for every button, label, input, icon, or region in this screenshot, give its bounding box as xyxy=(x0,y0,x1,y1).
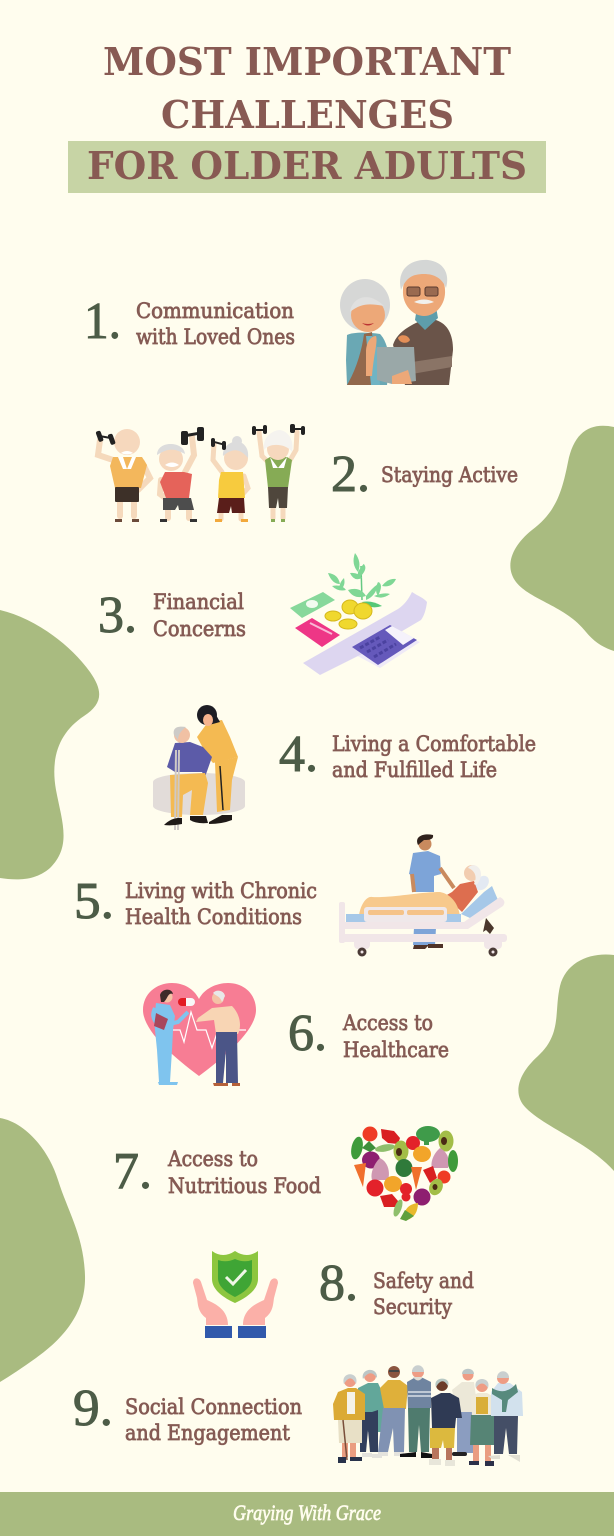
nurse xyxy=(197,720,238,763)
item 4: living a comfortable and fulfilled life xyxy=(153,705,536,830)
icon: older couple with tablet xyxy=(340,260,453,385)
pill xyxy=(178,998,195,1006)
person 8 xyxy=(488,1371,523,1462)
person 7 xyxy=(469,1379,496,1466)
item 6: access to healthcare: Healthcare xyxy=(343,1038,449,1063)
right hand xyxy=(243,1278,278,1325)
item 3: financial concerns: 3. xyxy=(98,587,137,644)
mattress and frame xyxy=(346,914,461,923)
footer bar xyxy=(0,1492,614,1536)
banknote xyxy=(290,592,335,618)
item 7: access to nutritious food: Access to xyxy=(167,1147,258,1172)
icon: carer beside patient in hospital bed xyxy=(339,834,507,956)
item 7: access to nutritious food: Nutritious Food xyxy=(168,1174,321,1199)
item 4: living a comfortable and fulfilled life: and Fulfilled Life xyxy=(332,758,497,783)
figure 4 xyxy=(252,424,305,522)
item 2: staying active: Staying Active xyxy=(381,463,518,488)
footer bar: Graying With Grace xyxy=(233,1500,381,1525)
item 2: staying active: 2. xyxy=(331,446,370,503)
item 3: financial concerns: Financial xyxy=(153,590,244,615)
left hand xyxy=(193,1278,228,1325)
icon: caregiver helping seated older man xyxy=(153,705,245,830)
carer xyxy=(409,851,441,892)
figure 1 xyxy=(95,429,150,522)
plant xyxy=(328,553,396,607)
title: MOST IMPORTANT xyxy=(103,39,511,84)
item 6: access to healthcare: 6. xyxy=(288,1005,327,1062)
item 1: communication with loved ones: 1. xyxy=(84,293,121,350)
title highlight band xyxy=(68,141,546,193)
coins xyxy=(325,600,372,629)
item 9: social connection and engagement: Social Connection xyxy=(125,1395,302,1420)
icon: four seniors lifting dumbbells xyxy=(95,424,305,522)
calculator xyxy=(352,625,417,665)
patient xyxy=(167,742,212,777)
ottoman xyxy=(153,773,245,815)
item 6: access to healthcare: Access to xyxy=(342,1011,433,1036)
icon: money, card, receipt and calculator xyxy=(290,553,427,675)
item 3: financial concerns xyxy=(98,553,427,675)
person 6 xyxy=(452,1369,478,1456)
item 1: communication with loved ones xyxy=(84,260,453,385)
item 8: safety and security: Security xyxy=(373,1295,453,1320)
item 4: living a comfortable and fulfilled life: Living a Comfortable xyxy=(332,732,536,757)
person 3 xyxy=(378,1366,408,1456)
item 7: access to nutritious food xyxy=(113,1126,458,1221)
receipt xyxy=(303,592,427,675)
item 4: living a comfortable and fulfilled life: 4. xyxy=(279,726,318,783)
title: CHALLENGES xyxy=(161,92,454,137)
item 9: social connection and engagement xyxy=(73,1365,523,1466)
item 9: social connection and engagement: 9. xyxy=(73,1380,113,1437)
person 5 xyxy=(429,1379,462,1466)
icon: heart with nurse and older man xyxy=(143,983,256,1086)
icon: hands holding shield xyxy=(193,1251,278,1338)
item 5: living with chronic health conditions: 5. xyxy=(74,873,114,930)
wheels xyxy=(354,938,502,956)
patient xyxy=(445,881,478,912)
cuffs xyxy=(205,1326,266,1338)
item 7: access to nutritious food: 7. xyxy=(113,1143,152,1200)
title: FOR OLDER ADULTS xyxy=(87,143,527,188)
item 1: communication with loved ones: with Loved Ones xyxy=(136,325,295,350)
nurse xyxy=(154,1003,175,1082)
credit card xyxy=(295,618,340,647)
item 8: safety and security: 8. xyxy=(319,1255,358,1312)
blanket xyxy=(359,892,460,916)
icon: heart made of vegetables xyxy=(349,1126,458,1221)
item 8: safety and security: Safety and xyxy=(373,1269,474,1294)
item 3: financial concerns: Concerns xyxy=(153,617,246,642)
older man xyxy=(196,1006,240,1034)
item 9: social connection and engagement: and Engagement xyxy=(125,1421,290,1446)
item 1: communication with loved ones: Communication xyxy=(136,299,294,324)
soft shadow xyxy=(350,628,420,668)
icon: group of older adults xyxy=(333,1365,523,1466)
item 5: living with chronic health conditions: Health Conditions xyxy=(125,905,302,930)
item 2: staying active xyxy=(95,424,518,522)
title xyxy=(68,39,546,193)
person 4 xyxy=(400,1365,432,1458)
item 8: safety and security xyxy=(193,1251,474,1338)
item 6: access to healthcare xyxy=(143,983,449,1086)
item 5: living with chronic health conditions: Living with Chronic xyxy=(125,879,317,904)
background blobs xyxy=(0,426,614,1382)
figure 3 xyxy=(211,436,248,522)
figure 2 xyxy=(157,427,204,522)
item 5: living with chronic health conditions xyxy=(74,834,507,956)
person 1 xyxy=(333,1374,365,1463)
raised mattress xyxy=(461,886,498,918)
person 2 xyxy=(358,1370,387,1458)
